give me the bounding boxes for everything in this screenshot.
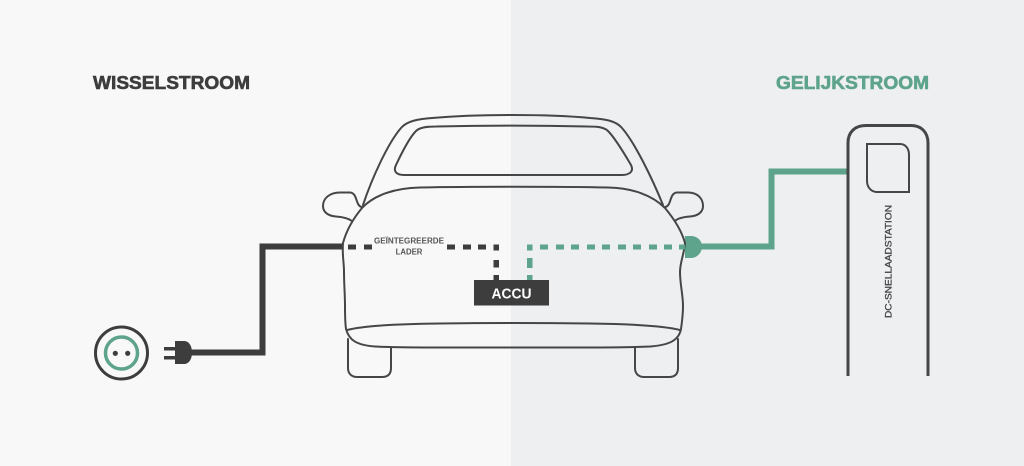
charger label: GEÏNTEGREERDE [374, 236, 444, 246]
right mirror [665, 192, 703, 221]
windshield [395, 126, 632, 175]
car body [343, 187, 685, 348]
charger label: LADER [396, 248, 423, 256]
heading: gelijkstroom: GELIJKSTROOM [776, 72, 929, 93]
car front view [323, 115, 703, 377]
cable: AC black line [190, 246, 343, 352]
charger label [374, 236, 444, 256]
left mirror [323, 192, 362, 221]
AC dashed line [348, 244, 499, 280]
station screen [867, 144, 909, 192]
cable: DC green line [685, 172, 848, 258]
icon: wall socket [96, 327, 148, 379]
left wheel [348, 339, 391, 377]
right wheel [635, 339, 678, 377]
front bumper line [347, 323, 680, 330]
DC dashed line [527, 244, 685, 280]
car roof [363, 115, 663, 205]
battery box: ACCU [492, 286, 532, 302]
heading: wisselstroom: WISSELSTROOM [93, 72, 250, 93]
icon: plug [164, 341, 192, 364]
battery box [474, 280, 549, 306]
station label: DC-SNELLAADSTATION [884, 205, 894, 318]
charging station [848, 126, 928, 376]
